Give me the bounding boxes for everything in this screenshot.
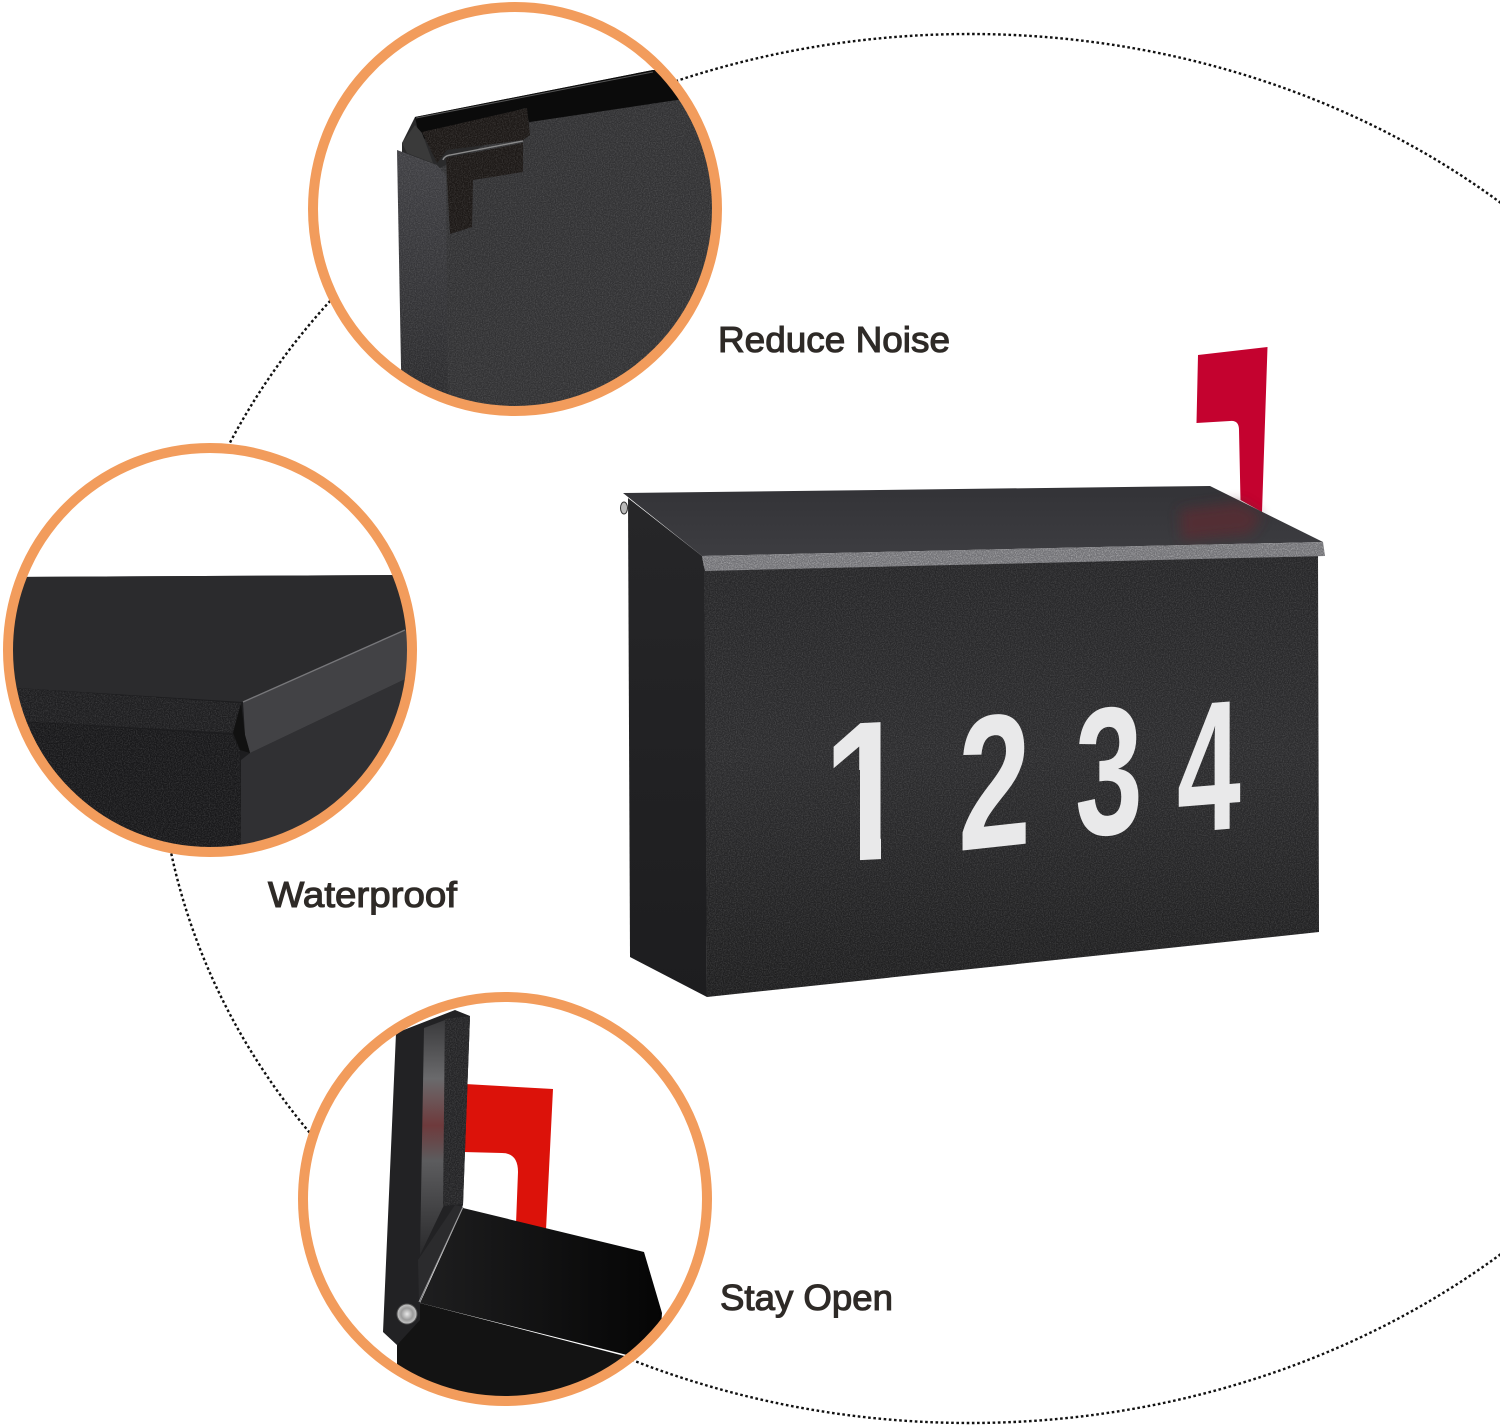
house number 4: 4: [1177, 661, 1241, 873]
textured main face: [440, 100, 712, 406]
house number 3: 3: [1075, 667, 1143, 876]
lid textured inner strip: [443, 1016, 470, 1206]
label: waterproof: Waterproof: [268, 874, 458, 915]
panel: reduce noise detail circle: [313, 7, 730, 420]
flag reflection on lid: [1180, 502, 1262, 540]
dark base: [402, 70, 653, 168]
panel: waterproof detail circle: [0, 448, 420, 860]
hinge triangle: [418, 1205, 463, 1302]
lid hinge screw: [620, 502, 628, 514]
waterproof close-up photo: [13, 575, 407, 847]
noise close-up photo: [397, 70, 730, 420]
open lid panel: [383, 1010, 470, 1345]
house number 1: 1: [823, 677, 909, 904]
side strip: [397, 150, 447, 394]
mailbox side face: [628, 498, 707, 997]
red flag: [1196, 347, 1268, 512]
left flap: [16, 688, 240, 732]
foam strip lower: [446, 143, 523, 234]
mailbox lid top: [623, 486, 1323, 556]
label: stay open: Stay Open: [720, 1277, 893, 1318]
stay open close-up photo: [383, 1010, 662, 1420]
fold: [233, 703, 250, 753]
hinge screw: [397, 1304, 417, 1324]
orange ring: [8, 448, 412, 852]
lid reflection: [420, 1020, 445, 1255]
foam corner: [402, 125, 433, 163]
orange ring: [313, 7, 717, 411]
mailbox front face: [704, 550, 1319, 997]
box interior: [420, 1208, 662, 1355]
lower box front: [397, 1303, 624, 1396]
panel: stay open detail circle: [303, 997, 707, 1420]
dark base: [16, 575, 405, 845]
red flag: [463, 1084, 553, 1230]
light edge: [443, 141, 523, 160]
lid front lip: [702, 542, 1325, 571]
top face: [0, 575, 420, 702]
orange ring: [303, 997, 707, 1401]
panel: main mailbox product: [620, 347, 1325, 997]
left body: [27, 722, 241, 847]
label: reduce noise: Reduce Noise: [718, 319, 950, 360]
house number 2: 2: [958, 671, 1031, 892]
black top band: [415, 70, 679, 139]
right flap: [243, 630, 407, 753]
right body: [241, 680, 405, 844]
foam strip upper: [422, 108, 530, 163]
